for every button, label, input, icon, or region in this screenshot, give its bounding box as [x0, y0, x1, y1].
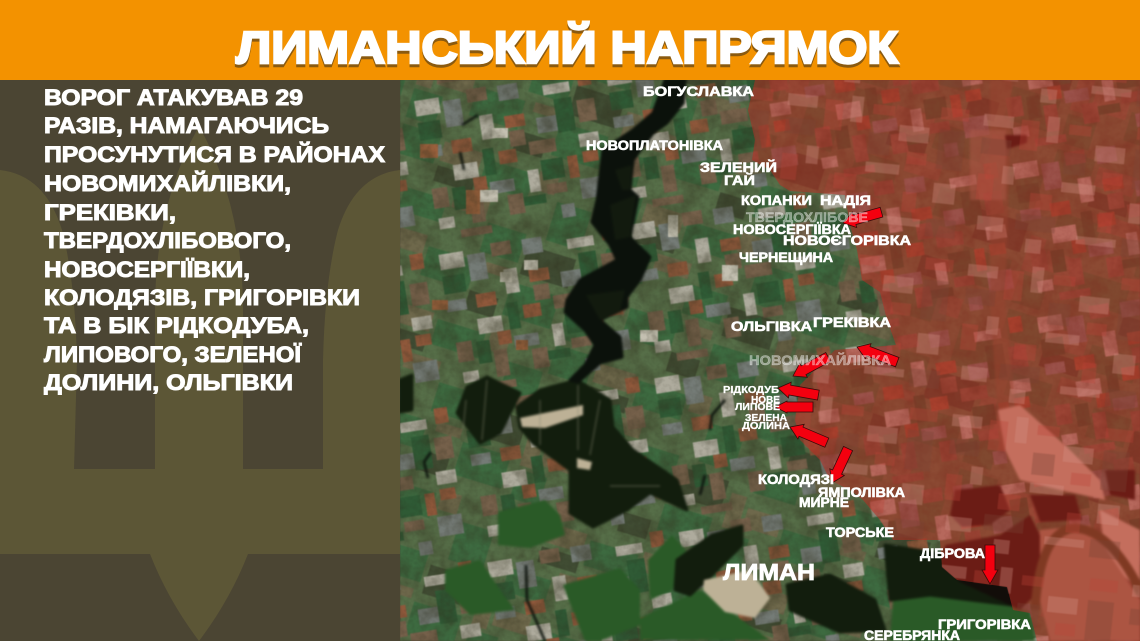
panel: left text panel with trident — [0, 80, 400, 641]
label: Tverdokhlibove: ТВЕРДОХЛІБОВЕ — [746, 210, 868, 225]
label: Yampolivka: ЯМПОЛІВКА — [818, 485, 905, 500]
text block: attack summary: ДОЛИНИ, ОЛЬГІВКИ — [44, 370, 293, 395]
panel: satellite map — [400, 80, 1140, 641]
text block: attack summary: ГРЕКІВКИ, — [44, 200, 176, 225]
label: Kolodiazi: КОЛОДЯЗІ — [758, 472, 834, 487]
arrow: Hrekivka — [856, 343, 900, 368]
label: Novomykhailivka: НОВОМИХАЙЛІВКА — [749, 353, 891, 368]
text block: attack summary: НОВОМИХАЙЛІВКИ, — [44, 171, 291, 196]
field texture noise — [400, 80, 1140, 641]
text block: attack summary: ЛИПОВОГО, ЗЕЛЕНОЇ — [44, 342, 302, 367]
label: Lyman: ЛИМАН — [723, 559, 815, 585]
text block: attack summary — [44, 85, 385, 395]
arrow group: attack directions — [775, 204, 998, 584]
arrow: Ridkodub — [777, 382, 820, 400]
terrain features: forests, sand, reservoir — [400, 80, 1140, 641]
map place labels — [586, 84, 1031, 641]
label: Chernehchyna: ЧЕРНЕЩИНА — [739, 250, 833, 265]
label: Dibrova: ДІБРОВА — [920, 546, 985, 561]
text block: attack summary: ВОРОГ АТАКУВАВ 29 — [44, 85, 303, 110]
label: Novoplatonivka: НОВОПЛАТОНІВКА — [586, 138, 723, 153]
label: Nove: НОВЕ — [751, 395, 780, 406]
label: Hrekivka: ГРЕКІВКА — [813, 315, 891, 330]
arrow: Lypove — [775, 401, 813, 413]
label: Hai: ГАЙ — [724, 173, 755, 188]
text block: attack summary: КОЛОДЯЗІВ, ГРИГОРІВКИ — [44, 285, 360, 310]
text block: attack summary: ТВЕРДОХЛІБОВОГО, — [44, 228, 291, 253]
label: Ridkodub: РІДКОДУБ — [723, 385, 779, 396]
occupied territory overlay — [748, 80, 1140, 641]
label: Kopanky: КОПАНКИ — [741, 193, 812, 208]
header band — [0, 0, 1140, 80]
text block: attack summary: ТА В БІК РІДКОДУБА, — [44, 313, 309, 338]
label: Zelenyi: ЗЕЛЕНИЙ — [700, 160, 777, 175]
label: Torske: ТОРСЬКЕ — [826, 525, 894, 540]
label: Nadiia: НАДІЯ — [820, 193, 871, 208]
arrow: Kolodiazi — [829, 446, 853, 483]
text block: attack summary: РАЗІВ, НАМАГАЮЧИСЬ — [44, 113, 329, 138]
label: Lypove: ЛИПОВЕ — [735, 402, 780, 413]
label: Novoiehorivka: НОВОЄГОРІВКА — [783, 233, 911, 248]
label: Hryhorivka: ГРИГОРІВКА — [938, 617, 1031, 632]
label: Dolyna: ДОЛИНА — [742, 421, 790, 432]
label: Zelena: ЗЕЛЕНА — [745, 413, 787, 424]
title shadow: ЛИМАНСЬКИЙ НАПРЯМОК — [236, 25, 899, 76]
arrow: Novomykhailivka — [792, 352, 831, 378]
arrow: Nadiia — [842, 206, 884, 228]
label: Olhivka: ОЛЬГІВКА — [731, 319, 812, 334]
label: Novoserhiivka: НОВОСЕРГІЇВКА — [733, 222, 851, 237]
arrow: Dibrova — [982, 545, 998, 584]
label: Bohuslavka: БОГУСЛАВКА — [643, 84, 754, 99]
title: ЛИМАНСЬКИЙ НАПРЯМОК — [236, 22, 899, 73]
arrow: Zelena Dolyna — [790, 424, 830, 448]
text block: attack summary: ПРОСУНУТИСЯ В РАЙОНАХ — [44, 142, 385, 167]
label: Myrne: МИРНЕ — [799, 495, 849, 510]
icon: trident watermark — [0, 126, 400, 641]
text block: attack summary: НОВОСЕРГІЇВКИ, — [44, 257, 250, 282]
